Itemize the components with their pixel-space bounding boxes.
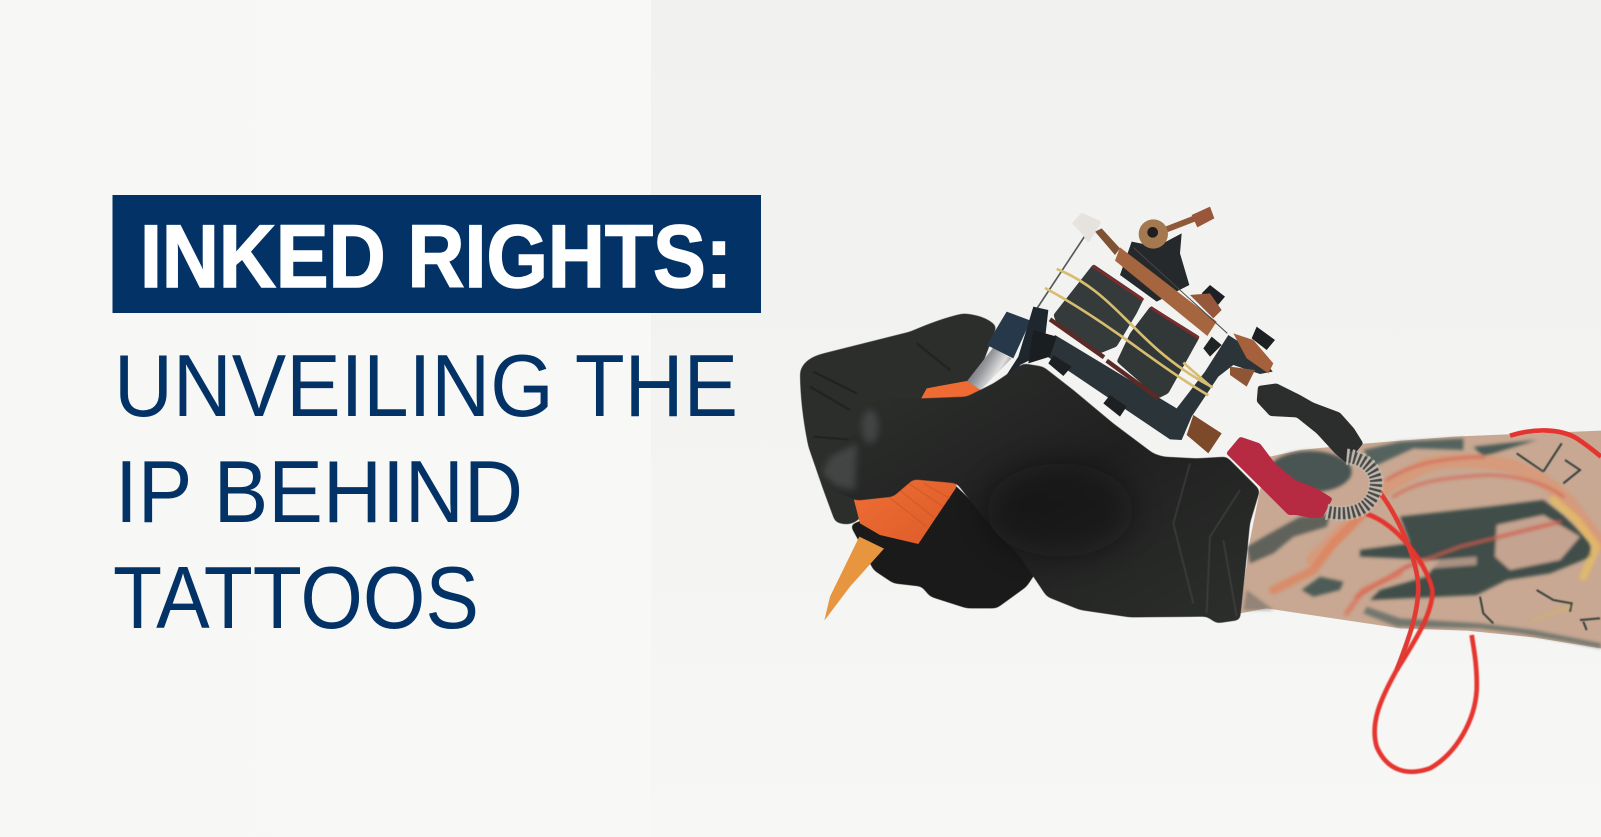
knuckle creases bbox=[810, 343, 950, 440]
subtitle: Unveiling the IP behind tattoos: UNVEILING THE bbox=[114, 336, 738, 435]
title banner: Inked Rights: INKED RIGHTS: bbox=[140, 206, 732, 306]
photo: black tattoo machine bbox=[1033, 207, 1275, 453]
rubber bands bbox=[1045, 269, 1213, 395]
subtitle: Unveiling the IP behind tattoos: TATTOOS bbox=[113, 548, 479, 647]
tube vise bbox=[987, 312, 1031, 358]
frame bolts bbox=[1048, 285, 1275, 453]
red cord second strand bbox=[1377, 488, 1418, 670]
thumb highlight bbox=[861, 410, 879, 443]
photo: gloved hand gripping machine bbox=[800, 307, 1260, 623]
machine post bbox=[1120, 233, 1189, 302]
red cord lower loop bbox=[1367, 514, 1477, 772]
photo: tattooed forearm bbox=[1240, 431, 1601, 648]
needle tip bbox=[824, 537, 884, 621]
front spring and copper bar bbox=[1095, 228, 1227, 336]
machine frame bbox=[1045, 335, 1273, 440]
upper fingers bbox=[800, 313, 997, 524]
subtitle: Unveiling the IP behind tattoos bbox=[113, 336, 738, 647]
vise lug bbox=[1028, 330, 1057, 363]
background: left panel bbox=[0, 0, 651, 837]
thumb wrinkle shine bbox=[822, 443, 857, 490]
hand body and thumb bbox=[820, 363, 1260, 623]
subtitle: Unveiling the IP behind tattoos: IP BEHIND bbox=[115, 442, 523, 541]
black cord grip bbox=[1257, 383, 1363, 463]
orange grip bbox=[854, 470, 960, 544]
photo: cord, clip and spring bbox=[1226, 383, 1601, 772]
cuff folds bbox=[1173, 463, 1240, 617]
contact screw and binding post bbox=[1139, 207, 1214, 249]
chrome tube bbox=[967, 347, 1012, 391]
lower fingers bbox=[850, 483, 1040, 608]
red clip bbox=[1226, 437, 1333, 518]
background: photo backdrop bbox=[651, 0, 1601, 837]
palm shading bbox=[987, 463, 1133, 557]
wing nut bbox=[1003, 307, 1048, 382]
red cord upper strand bbox=[1510, 430, 1601, 457]
armature needle bar and grommet bbox=[1033, 213, 1102, 314]
grip top bbox=[921, 381, 981, 403]
coils bbox=[1050, 264, 1200, 398]
spring coil bbox=[1327, 457, 1376, 513]
